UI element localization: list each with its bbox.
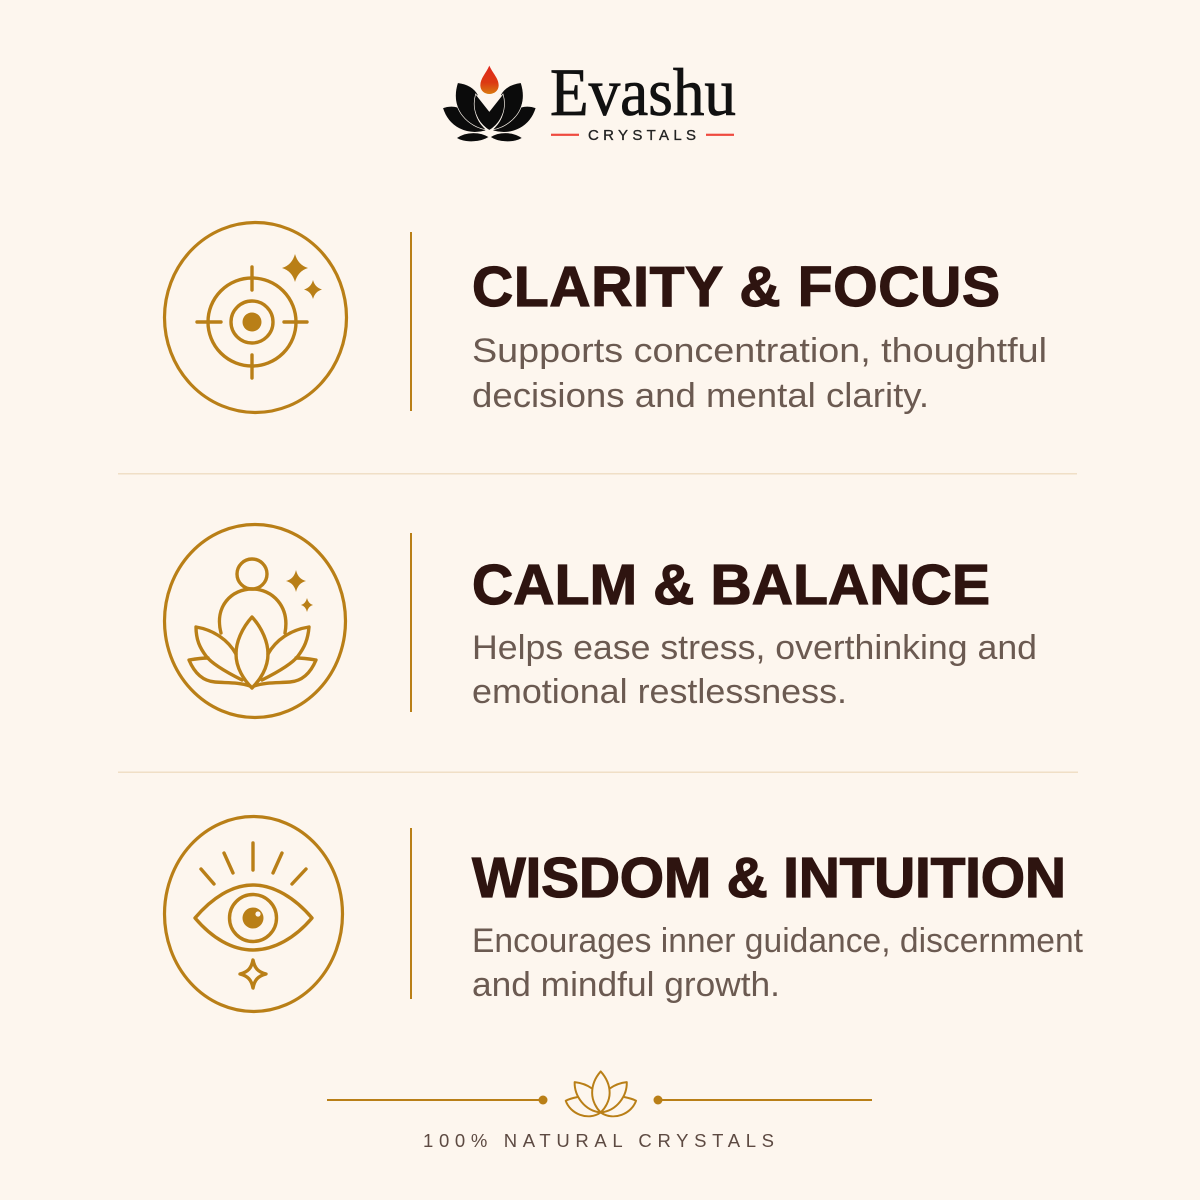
brand name: Evashu (550, 54, 736, 130)
description: decisions and mental clarity. (472, 377, 929, 415)
description: and mindful growth. (472, 966, 780, 1004)
heading: WISDOM & INTUITION (472, 846, 1066, 910)
icon: small lotus (566, 1071, 636, 1116)
divider line (410, 232, 412, 411)
description: Supports concentration, thoughtful (472, 332, 1047, 370)
brand subtitle: CRYSTALS (588, 127, 696, 144)
description: emotional restlessness. (472, 673, 847, 711)
heading: CALM & BALANCE (472, 553, 990, 617)
panel: calm and balance (164, 524, 1037, 718)
footer text: 100% NATURAL CRYSTALS (423, 1130, 774, 1151)
logo: Evashu Crystals (443, 54, 736, 144)
description: Encourages inner guidance, discernment (472, 922, 1084, 960)
panel: clarity and focus (164, 222, 1047, 415)
heading: CLARITY & FOCUS (472, 255, 1000, 319)
footer ornament (327, 1071, 872, 1116)
description (472, 629, 1037, 711)
description (472, 922, 1084, 1004)
icon: lotus with red drop (443, 66, 536, 142)
divider line (410, 828, 412, 999)
description (472, 332, 1047, 415)
icon: meditating figure on lotus (164, 524, 346, 718)
icon: eye with rays (164, 816, 342, 1012)
icon: target with sparkles (164, 222, 346, 412)
panel: wisdom and intuition (164, 816, 1084, 1012)
description: Helps ease stress, overthinking and (472, 629, 1037, 667)
divider line (410, 533, 412, 712)
